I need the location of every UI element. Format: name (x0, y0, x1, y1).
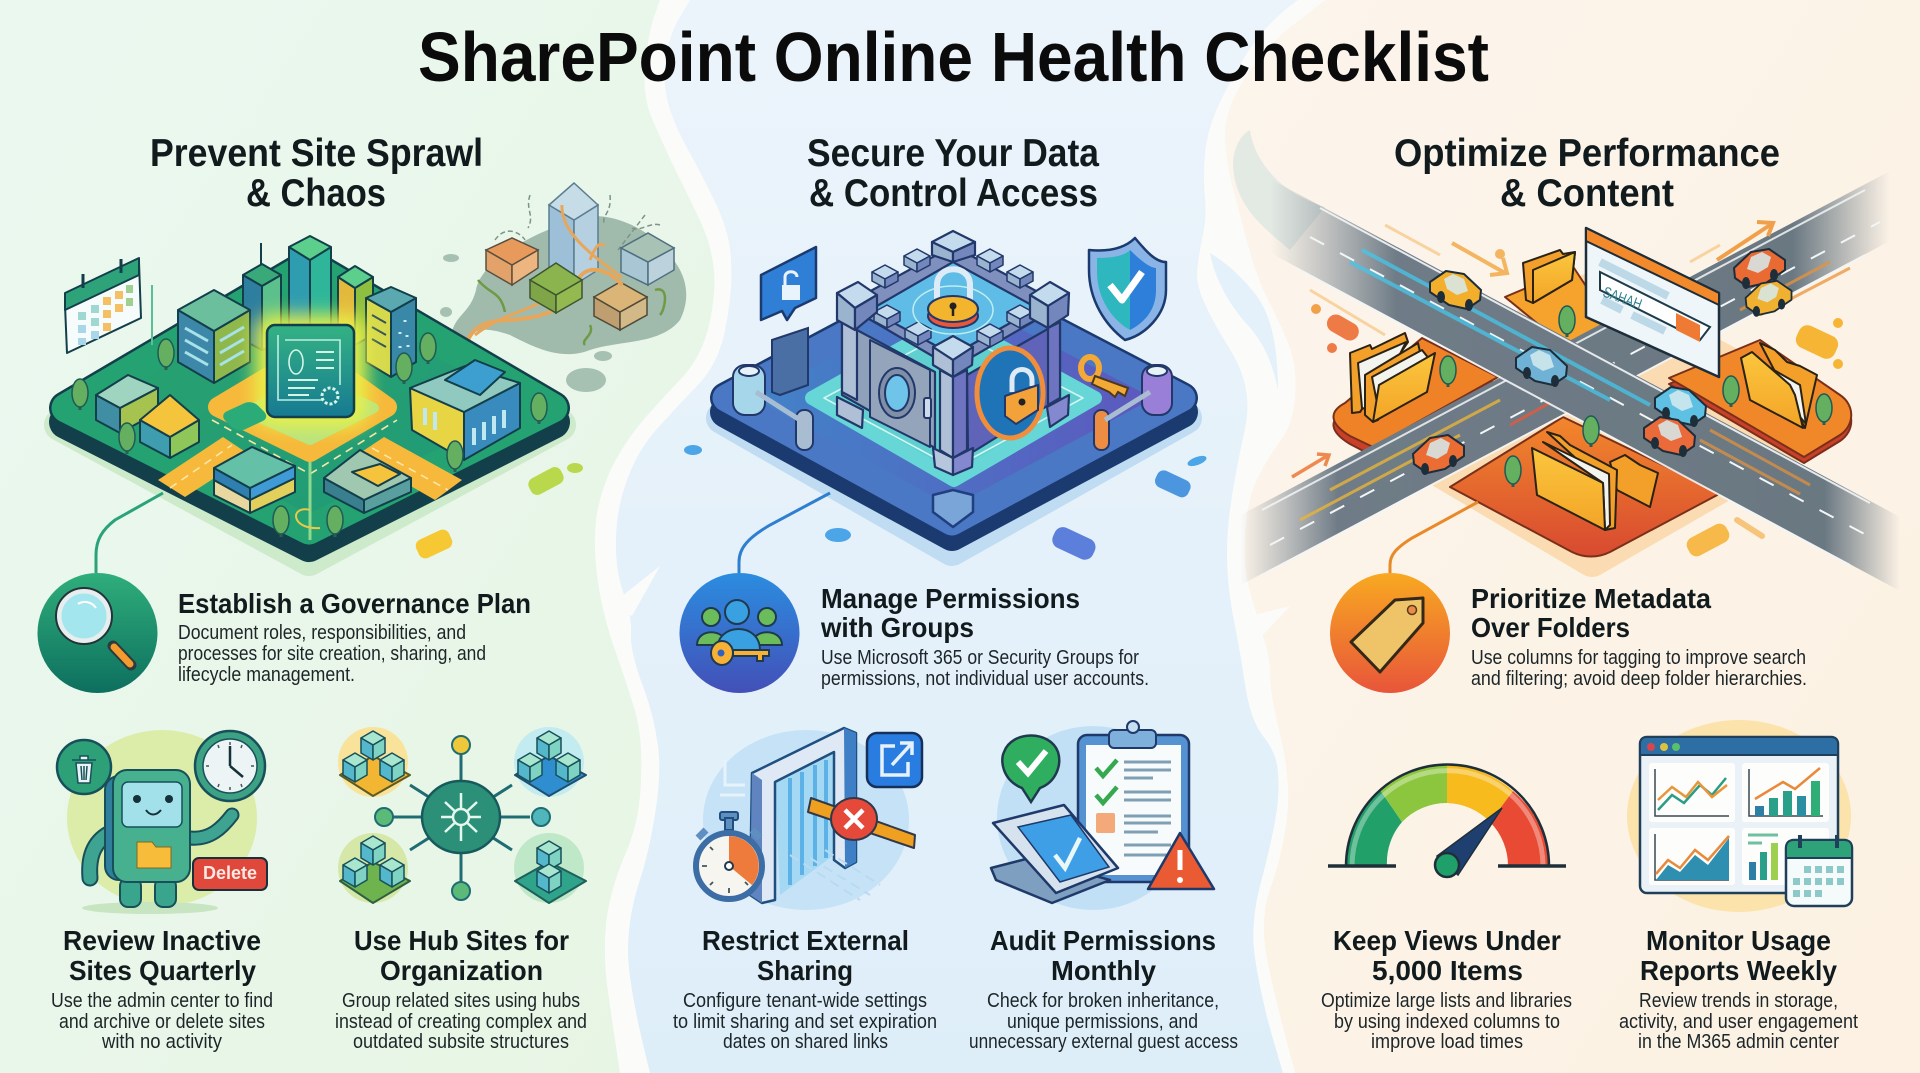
card: keep views under 5000 (1321, 764, 1572, 1053)
connector: permissions (739, 493, 830, 573)
card: review inactive sites: with no activity (101, 1031, 222, 1053)
callout: prioritize metadata: Use columns for tagging to improve search (1471, 647, 1806, 669)
callout: prioritize metadata: Prioritize Metadata (1471, 583, 1711, 614)
illustration: organized city platform (60, 236, 560, 560)
card: restrict external sharing: dates on shared links (723, 1031, 888, 1053)
callout: establish a governance plan: Document roles, responsibilities, and (178, 622, 466, 644)
icon: folder lock (761, 247, 816, 320)
connector: governance (96, 493, 163, 573)
billboard search window: SAHAH (1601, 284, 1644, 313)
card: keep views under 5000: improve load times (1371, 1031, 1523, 1053)
icon: magnifier (38, 573, 158, 693)
callout: manage permissions with groups (680, 573, 1149, 693)
callout: manage permissions with groups: Manage Permissions (821, 583, 1080, 614)
callout: establish a governance plan: processes for site creation, sharing, and (178, 643, 486, 665)
icon: shield (1089, 238, 1166, 340)
icon: tag (1330, 573, 1450, 693)
card: review inactive sites: and archive or delete sites (59, 1011, 265, 1033)
heading: optimize performance: Optimize Performance (1394, 132, 1780, 175)
road: southwest to northeast (1235, 171, 1890, 588)
card: review inactive sites: Review Inactive (63, 925, 261, 956)
heading: secure your data (807, 132, 1099, 215)
card: use hub sites: outdated subsite structures (353, 1031, 569, 1053)
card: use hub sites: Group related sites using hubs (342, 990, 580, 1012)
card: use hub sites (335, 727, 587, 1053)
illustration: chaotic sites blob (440, 183, 686, 392)
heading: prevent site sprawl: Prevent Site Sprawl (150, 132, 483, 175)
card: keep views under 5000: by using indexed columns to (1334, 1011, 1560, 1033)
panel: secure your data (673, 132, 1238, 1053)
card: audit permissions: Audit Permissions (990, 925, 1216, 956)
heading: secure your data: & Control Access (809, 172, 1098, 215)
card: keep views under 5000: Optimize large lists and libraries (1321, 990, 1572, 1012)
icon: calendar (65, 258, 152, 353)
towers (178, 236, 416, 383)
card: audit permissions: Check for broken inheritance, (987, 990, 1219, 1012)
heading: prevent site sprawl: & Chaos (246, 172, 386, 215)
icon: hub network (338, 727, 586, 903)
decorative arrows and blobs orange (1292, 222, 1843, 559)
castle body (837, 246, 1069, 475)
icon: robot with delete (57, 730, 267, 914)
decorative diamonds green (219, 400, 583, 561)
card: monitor usage reports: activity, and user engagement (1619, 1011, 1858, 1033)
illustration: fortress platform (722, 231, 1186, 550)
safe door (870, 340, 931, 447)
card: use hub sites: instead of creating complex and (335, 1011, 587, 1033)
callout: establish a governance plan: lifecycle management. (178, 664, 355, 686)
trees on platform (1440, 306, 1832, 487)
title: SharePoint Online Health Checklist (418, 18, 1489, 96)
icon: performance gauge (1328, 764, 1566, 877)
billboard search window (1586, 228, 1719, 377)
card: monitor usage reports: Reports Weekly (1640, 955, 1837, 986)
card: restrict external sharing: to limit sharing and set expiration (673, 1011, 937, 1033)
panel: optimize performance (1235, 132, 1900, 1053)
callout: manage permissions with groups: permissions, not individual user accounts. (821, 668, 1149, 690)
card: audit permissions (969, 721, 1238, 1053)
card: restrict external sharing (673, 728, 937, 1053)
trees (72, 333, 547, 537)
card: restrict external sharing: Restrict External (702, 925, 909, 956)
callout: prioritize metadata: and filtering; avoid deep folder hierarchies. (1471, 668, 1807, 690)
icon: robot with delete: Delete (203, 863, 257, 883)
card: audit permissions: unnecessary external guest access (969, 1031, 1238, 1053)
card: monitor usage reports: Monitor Usage (1646, 925, 1831, 956)
callout: manage permissions with groups: Use Microsoft 365 or Security Groups for (821, 647, 1139, 669)
card: restrict external sharing: Configure tenant-wide settings (683, 990, 927, 1012)
callout: manage permissions with groups: with Groups (820, 612, 974, 643)
heading: optimize performance (1394, 132, 1780, 215)
card: audit permissions: Monthly (1051, 955, 1156, 986)
small buildings (96, 360, 520, 513)
card: review inactive sites: Use the admin center to find (51, 990, 273, 1012)
cars (1413, 249, 1792, 475)
heading: secure your data: Secure Your Data (807, 132, 1099, 175)
shield emblem (933, 490, 973, 527)
card: keep views under 5000: Keep Views Under (1333, 925, 1561, 956)
card: use hub sites: Use Hub Sites for (354, 925, 569, 956)
card: monitor usage reports (1619, 720, 1858, 1053)
card: keep views under 5000: 5,000 Items (1372, 955, 1523, 986)
governance document sign (255, 315, 367, 427)
card: review inactive sites: Sites Quarterly (69, 955, 256, 986)
padlock on roof (913, 269, 993, 334)
card: use hub sites: Organization (380, 955, 543, 986)
icon: gate and stopwatch (696, 728, 922, 910)
callout: prioritize metadata (1330, 573, 1807, 693)
castle battlements (837, 231, 1069, 377)
card: monitor usage reports: Review trends in storage, (1639, 990, 1838, 1012)
folders (1350, 250, 1817, 530)
icon: dashboard with calendar (1627, 720, 1852, 912)
connector: metadata (1390, 502, 1478, 573)
card: restrict external sharing: Sharing (757, 955, 853, 986)
decorative blobs blue (684, 445, 1208, 563)
card: monitor usage reports: in the M365 admin center (1638, 1031, 1839, 1053)
road: northwest to southeast (1250, 168, 1900, 591)
card: review inactive sites (51, 730, 273, 1053)
padlock ring (977, 348, 1043, 438)
icon: clipboard and tablet (991, 721, 1214, 910)
heading: optimize performance: & Content (1500, 172, 1674, 215)
illustration: highway intersection (1235, 168, 1900, 591)
callout: establish a governance plan: Establish a Governance Plan (178, 588, 531, 619)
callout: prioritize metadata: Over Folders (1471, 612, 1630, 643)
card: audit permissions: unique permissions, and (1007, 1011, 1198, 1033)
orange quadrants (1334, 268, 1851, 556)
icon: group with key (680, 573, 800, 693)
fence posts and barrier (733, 328, 1172, 450)
heading: prevent site sprawl (150, 132, 483, 215)
callout: establish a governance plan (38, 573, 531, 693)
icon: key (1081, 357, 1128, 397)
yellow roads (158, 352, 462, 500)
panel: prevent site sprawl (38, 132, 686, 1053)
